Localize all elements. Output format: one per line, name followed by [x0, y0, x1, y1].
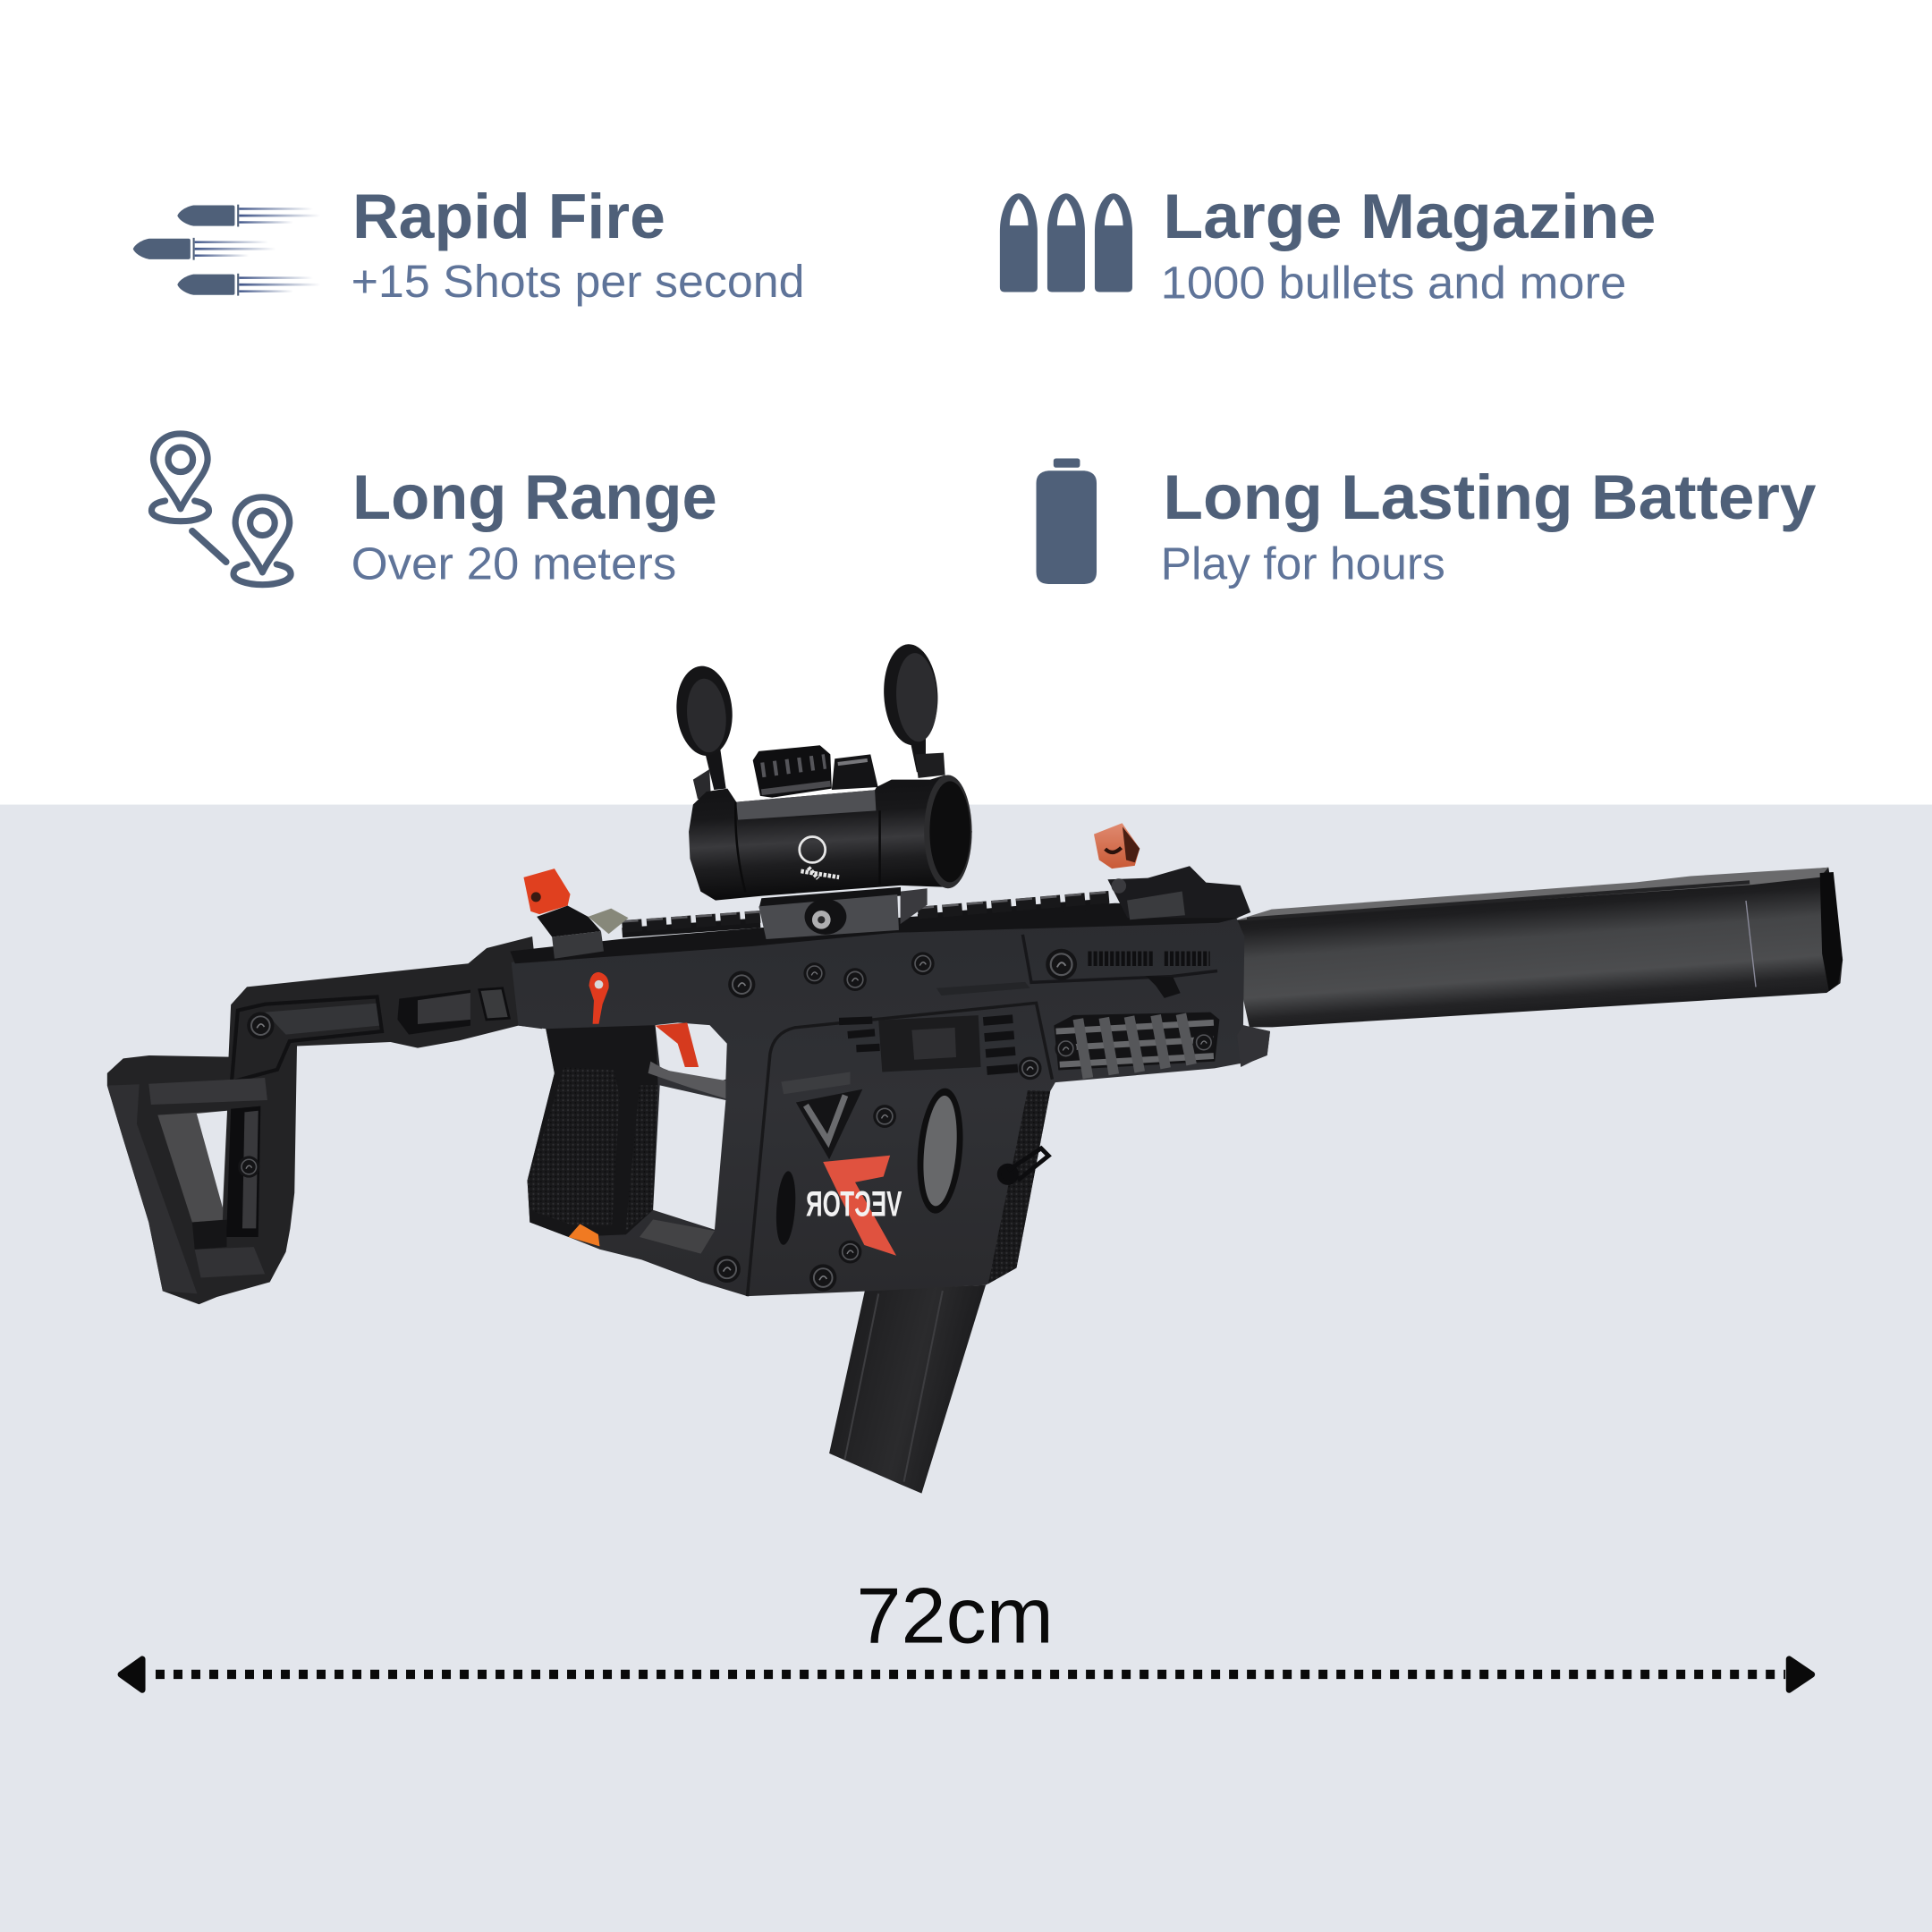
receiver vents	[839, 1015, 1018, 1072]
icon: flying bullets	[133, 205, 320, 296]
product illustration: toy blaster	[107, 643, 1843, 1494]
pistol grip	[528, 1025, 658, 1237]
red trigger	[656, 1022, 699, 1067]
icon: battery	[1037, 458, 1097, 584]
icon: three bullets	[1000, 193, 1132, 292]
V emblem	[796, 1089, 862, 1159]
arrow: left	[121, 1659, 142, 1690]
barrel	[1233, 868, 1843, 1027]
feature: large magazine	[1000, 181, 1656, 308]
rear sight	[523, 869, 629, 959]
orange button	[569, 1224, 599, 1246]
sling clip	[999, 1148, 1048, 1182]
dotted length line	[156, 1671, 1785, 1678]
dimension: overall length	[121, 1571, 1812, 1690]
scope lens opening	[924, 775, 972, 888]
trigger guard openings	[640, 1022, 727, 1254]
scope top band	[736, 790, 876, 820]
folding stock	[107, 936, 542, 1304]
icon: two map pins	[151, 434, 291, 585]
red selector switch	[589, 972, 609, 1024]
engraved marking	[1088, 953, 1210, 964]
front sight	[1094, 823, 1250, 919]
scope logo	[800, 836, 839, 878]
lever	[781, 1072, 851, 1094]
top rail	[510, 892, 1238, 963]
stock brace bars	[148, 1078, 267, 1105]
scope lens covers	[673, 643, 945, 799]
receiver side plate	[747, 935, 1217, 1296]
heading: large magazine: Large Magazine	[1163, 181, 1656, 251]
stock screws	[238, 1013, 275, 1178]
feature: long range	[151, 434, 717, 589]
mount screw	[805, 899, 846, 935]
stock hole	[157, 1111, 227, 1223]
text: bullet count: 1000 bullets and more	[1161, 257, 1626, 308]
feature: rapid fire	[133, 181, 805, 307]
scope mount	[758, 887, 928, 939]
heading: long range: Long Range	[352, 462, 717, 532]
receiver screws	[714, 949, 1215, 1292]
heading: long lasting battery: Long Lasting Battery	[1163, 462, 1817, 532]
scope turrets	[753, 745, 878, 798]
handguard rail	[1054, 1013, 1219, 1078]
handguard tip	[1237, 1026, 1270, 1067]
feature: long lasting battery	[1037, 458, 1817, 589]
text: shots per second: +15 Shots per second	[352, 256, 805, 307]
arrow: right	[1789, 1659, 1812, 1690]
text: play time: Play for hours	[1161, 538, 1445, 589]
text: range distance: Over 20 meters	[352, 538, 676, 589]
side grip ridges	[988, 1090, 1050, 1284]
receiver body	[512, 905, 1270, 1296]
magazine	[829, 1285, 986, 1494]
heading: rapid fire: Rapid Fire	[352, 181, 665, 251]
mirrored vector logo: VECTOR	[806, 1185, 902, 1224]
scope tube	[689, 775, 972, 901]
stock arm texture	[265, 1004, 379, 1035]
red dot scope	[673, 643, 972, 939]
red seven logo	[823, 1156, 896, 1256]
slot	[774, 1171, 798, 1245]
lower grey panel	[0, 805, 1932, 1932]
dimension value: 72cm	[856, 1571, 1054, 1659]
oval window	[912, 1086, 968, 1216]
